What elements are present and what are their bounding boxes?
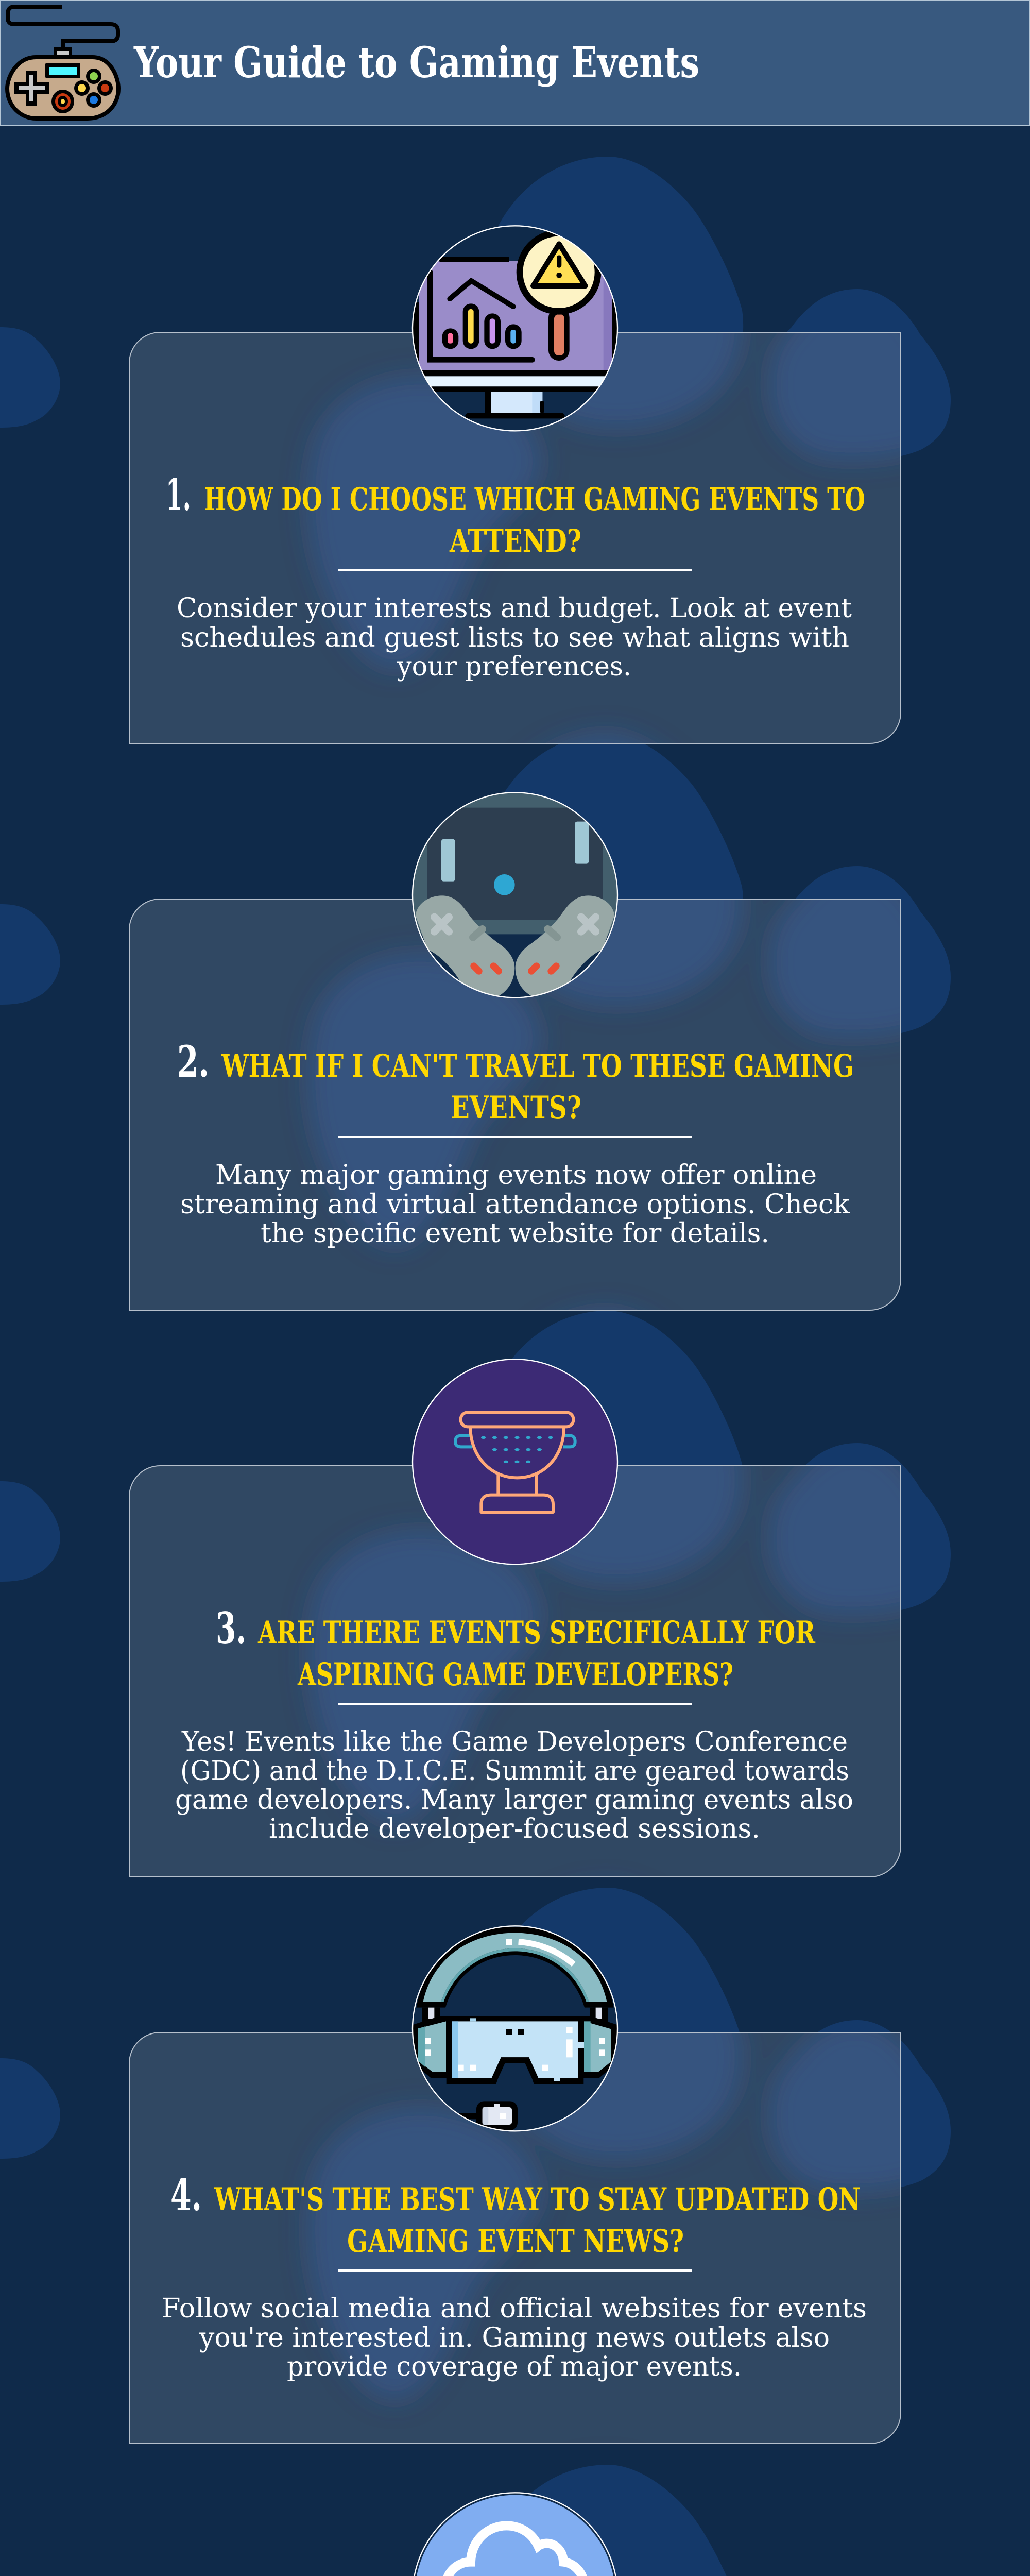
answer text: Follow social media and official websites for events — [162, 2293, 867, 2324]
answer text: provide coverage of major events. — [287, 2351, 742, 2382]
title: Your Guide to Gaming Events — [133, 38, 699, 88]
question heading: ASPIRING GAME DEVELOPERS? — [297, 1656, 733, 1693]
answer text: streaming and virtual attendance options. Check — [180, 1189, 850, 1220]
answer text: schedules and guest lists to see what aligns with — [180, 622, 849, 653]
panel: question 3 — [129, 1359, 901, 1877]
icon: pong screen with controllers — [381, 773, 649, 1018]
question heading: 3. — [216, 1603, 246, 1654]
panel: question 1 — [129, 206, 901, 743]
question heading — [177, 1036, 854, 1126]
panel: question 5 — [129, 2493, 901, 2576]
icon: cloud video — [413, 2493, 617, 2576]
panel: question 2 — [129, 773, 901, 1310]
panel: question 4 — [129, 1906, 901, 2444]
question heading: ARE THERE EVENTS SPECIFICALLY FOR — [258, 1615, 816, 1651]
question heading: ATTEND? — [449, 523, 581, 560]
icon: colander trophy — [413, 1359, 617, 1564]
answer text: Consider your interests and budget. Look at event — [177, 593, 852, 624]
answer text: game developers. Many larger gaming events also — [175, 1785, 853, 1816]
question heading: 1. — [166, 469, 191, 520]
answer text: you're interested in. Gaming news outlets also — [199, 2323, 830, 2353]
answer text: (GDC) and the D.I.C.E. Summit are geared towards — [180, 1756, 849, 1787]
question heading: 2. — [177, 1036, 209, 1087]
question heading — [166, 469, 865, 560]
answer text: include developer-focused sessions. — [269, 1814, 760, 1844]
answer text — [175, 1726, 853, 1844]
question heading — [170, 2170, 861, 2260]
answer text — [177, 593, 852, 682]
answer text — [180, 1160, 850, 1249]
question heading: EVENTS? — [451, 1090, 581, 1126]
answer text: the specific event website for details. — [261, 1218, 769, 1249]
answer text: Yes! Events like the Game Developers Conference — [181, 1726, 848, 1757]
header banner — [1, 1, 1029, 125]
question heading: GAMING EVENT NEWS? — [347, 2223, 684, 2260]
question heading: WHAT IF I CAN'T TRAVEL TO THESE GAMING — [221, 1048, 854, 1084]
icon: VR headset — [381, 1906, 649, 2151]
answer text — [162, 2293, 867, 2382]
icon: game controller — [7, 7, 118, 118]
icon: monitor with warning magnifier — [381, 206, 649, 451]
question heading — [216, 1603, 816, 1693]
question heading: 4. — [170, 2170, 202, 2221]
answer text: Many major gaming events now offer online — [215, 1160, 817, 1191]
answer text: your preferences. — [397, 651, 631, 682]
